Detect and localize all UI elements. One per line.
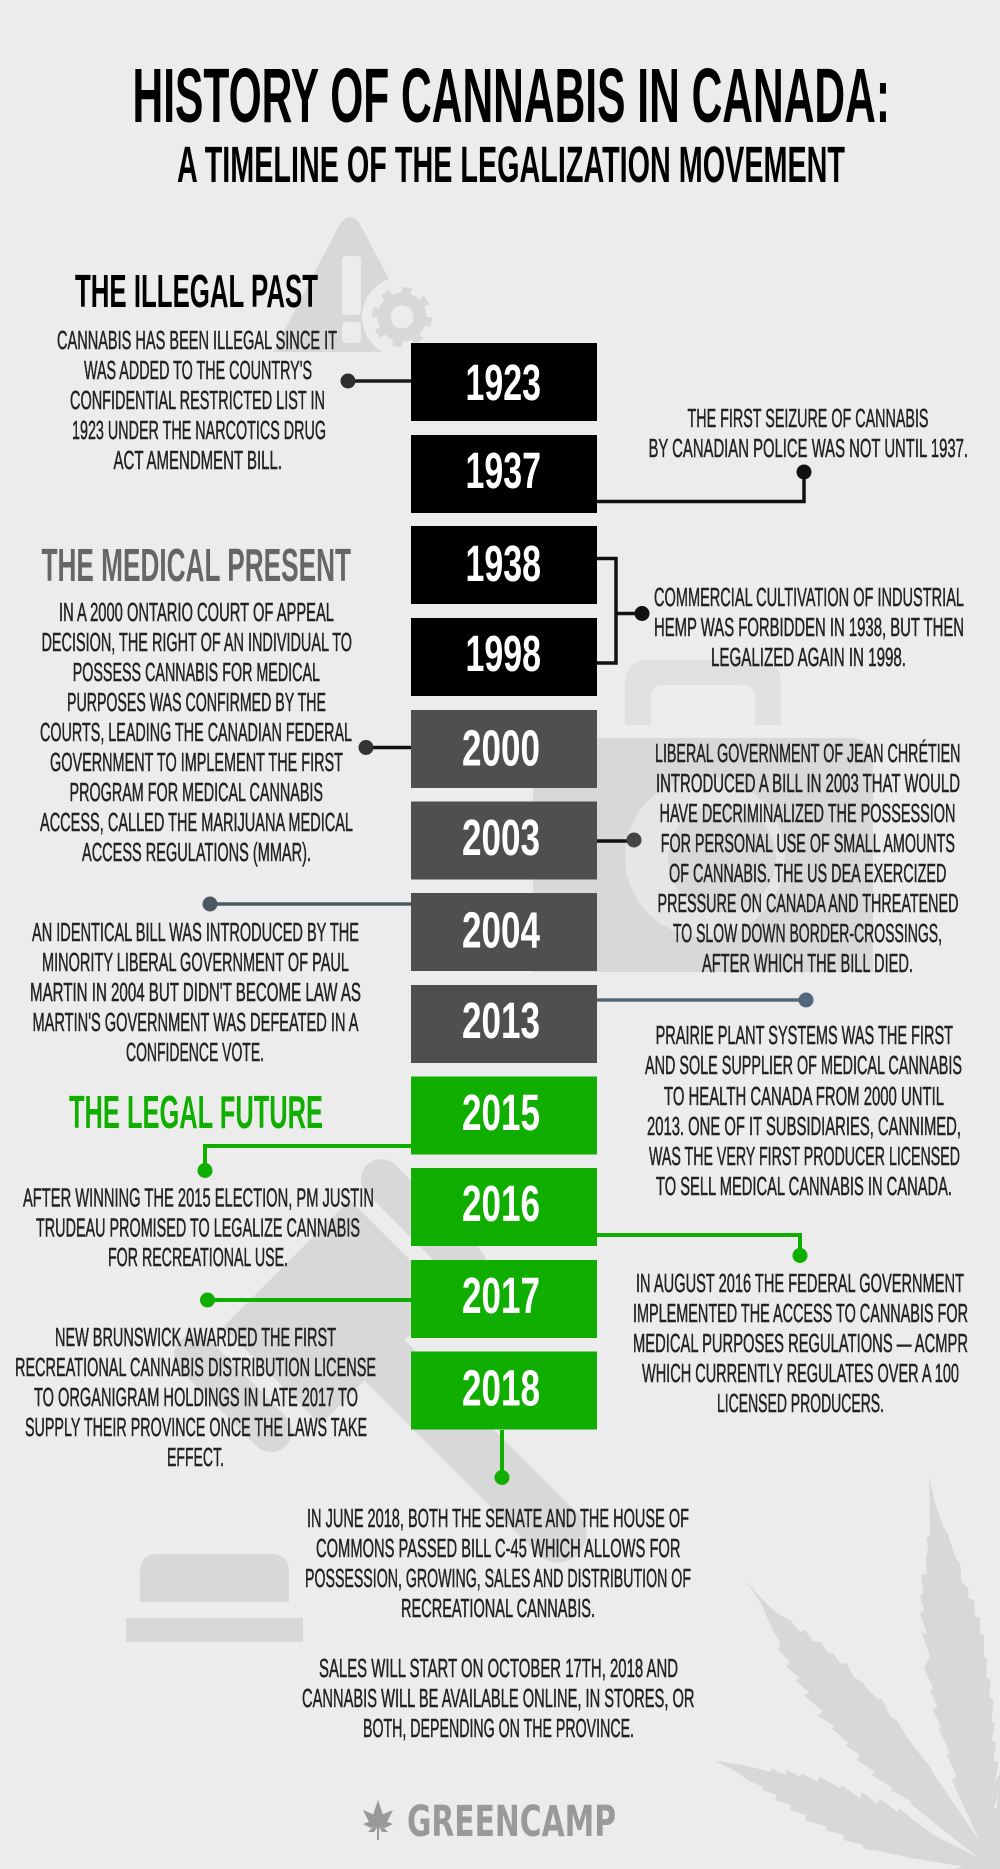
heading: the medical present: THE MEDICAL PRESENT — [42, 539, 351, 591]
icon: padlock — [533, 660, 873, 972]
year box: 1998 — [411, 618, 597, 696]
year box: 1923: 1923 — [466, 354, 541, 411]
text: 2000: DECISION, THE RIGHT OF AN INDIVIDUAL TO — [42, 629, 352, 657]
text: 1923: 1923 UNDER THE NARCOTICS DRUG — [72, 417, 326, 445]
text: 2018: POSSESSION, GROWING, SALES AND DISTRIBUTION OF — [305, 1565, 691, 1593]
text: 2000: GOVERNMENT TO IMPLEMENT THE FIRST — [50, 749, 343, 777]
year box: 2018 — [411, 1352, 597, 1430]
text: 2017: EFFECT. — [167, 1444, 224, 1472]
year box: 2003 — [411, 802, 597, 880]
text: 1938 and 1998 — [654, 584, 964, 672]
text: 2000: ACCESS REGULATIONS (MMAR). — [82, 839, 311, 867]
text: 2016 — [633, 1270, 968, 1418]
text: 2000: COURTS, LEADING THE CANADIAN FEDERAL — [40, 719, 352, 747]
text: 2000: ACCESS, CALLED THE MARIJUANA MEDICAL — [40, 809, 353, 837]
year box: 2015: 2015 — [462, 1084, 540, 1141]
text: 2018: RECREATIONAL CANNABIS. — [401, 1595, 595, 1623]
logo: greencamp — [363, 1798, 616, 1847]
connector: 2015 — [198, 1146, 411, 1178]
logo: greencamp: GREENCAMP — [407, 1798, 616, 1847]
year box: 1923 — [411, 343, 597, 421]
connector: 1937 — [597, 464, 812, 502]
year box: 2016 — [411, 1168, 597, 1246]
year box: 2013: 2013 — [462, 992, 540, 1049]
icon: cannabis leaf watermark — [714, 1477, 1000, 1869]
text: 2017 — [15, 1324, 376, 1472]
text: 2000 — [40, 599, 353, 867]
year box: 2000: 2000 — [462, 720, 540, 776]
text: 1923 — [57, 327, 337, 475]
year box: 2017 — [411, 1260, 597, 1338]
text: 2013 — [645, 1022, 962, 1201]
text: 2017: RECREATIONAL CANNABIS DISTRIBUTION LICENSE — [15, 1354, 376, 1382]
year box: 2013 — [411, 985, 597, 1063]
connector: 2016 — [597, 1235, 808, 1263]
text: 2015 — [23, 1184, 374, 1272]
year box: 2000 — [411, 710, 597, 788]
text: 2004: MARTIN'S GOVERNMENT WAS DEFEATED IN A — [32, 1009, 358, 1037]
text: 2017: NEW BRUNSWICK AWARDED THE FIRST — [55, 1324, 336, 1352]
connector: 1923 — [340, 374, 411, 388]
connector: 2003 — [597, 832, 642, 848]
connector: 2018 — [494, 1430, 510, 1485]
text: 2015: AFTER WINNING THE 2015 ELECTION, PM JUSTIN — [23, 1184, 374, 1212]
connector: 2017 — [200, 1292, 411, 1308]
text: 1923: ACT AMENDMENT BILL. — [114, 447, 282, 475]
icon: logo leaf — [363, 1800, 393, 1840]
icon: gavel — [126, 1179, 558, 1642]
text: 2015: FOR RECREATIONAL USE. — [108, 1244, 288, 1272]
year box: 1937 — [411, 435, 597, 513]
year box: 2017: 2017 — [462, 1267, 540, 1324]
text: 2004: MINORITY LIBERAL GOVERNMENT OF PAUL — [42, 949, 349, 977]
connector: 1938 and 1998 — [597, 558, 650, 663]
text: 1923: CANNABIS HAS BEEN ILLEGAL SINCE IT — [57, 327, 337, 355]
year box: 1937: 1937 — [466, 442, 541, 499]
text: 2000: PURPOSES WAS CONFIRMED BY THE — [67, 689, 326, 717]
text: 2015: TRUDEAU PROMISED TO LEGALIZE CANNABIS — [36, 1214, 360, 1242]
text: 2018: BOTH, DEPENDING ON THE PROVINCE. — [363, 1715, 634, 1743]
text: 2000: POSSESS CANNABIS FOR MEDICAL — [73, 659, 320, 687]
connector: 2013 — [597, 992, 814, 1008]
text: 2018: SALES WILL START ON OCTOBER 17TH, 2018 AND — [319, 1655, 678, 1683]
text: 1923: CONFIDENTIAL RESTRICTED LIST IN — [70, 387, 325, 415]
year box: 1938 — [411, 526, 597, 604]
connector: 2000 — [358, 740, 411, 755]
year box: 1938: 1938 — [466, 535, 541, 592]
text: 2018 — [302, 1505, 694, 1743]
text: 2018: CANNABIS WILL BE AVAILABLE ONLINE, IN STORES, OR — [302, 1685, 694, 1713]
text: 2004: AN IDENTICAL BILL WAS INTRODUCED BY THE — [32, 919, 359, 947]
text: 2017: TO ORGANIGRAM HOLDINGS IN LATE 2017 TO — [34, 1384, 358, 1412]
year box: 2003: 2003 — [462, 809, 540, 866]
icon: warning triangle with gear — [273, 217, 442, 357]
text: 2004 — [30, 919, 361, 1067]
text: 2003 — [655, 739, 960, 978]
text: 2017: SUPPLY THEIR PROVINCE ONCE THE LAWS TAKE — [25, 1414, 367, 1442]
text: 2018: IN JUNE 2018, BOTH THE SENATE AND THE HOUSE OF — [307, 1505, 689, 1533]
year box: 2004 — [411, 893, 597, 971]
heading: the illegal past: THE ILLEGAL PAST — [75, 265, 318, 317]
connector: 2004 — [202, 896, 411, 912]
text: 2004: MARTIN IN 2004 BUT DIDN'T BECOME LAW AS — [30, 979, 361, 1007]
year box: 2004: 2004 — [462, 902, 540, 958]
year box: 2016: 2016 — [462, 1175, 540, 1232]
text: 2000: PROGRAM FOR MEDICAL CANNABIS — [70, 779, 323, 807]
year box: 2015 — [411, 1076, 597, 1154]
text: 2018: COMMONS PASSED BILL C-45 WHICH ALLOWS FOR — [316, 1535, 680, 1563]
text: 2004: CONFIDENCE VOTE. — [126, 1039, 264, 1067]
text: 2000: IN A 2000 ONTARIO COURT OF APPEAL — [59, 599, 334, 627]
text: 1937 — [648, 405, 968, 463]
year box: 2018: 2018 — [462, 1360, 540, 1416]
year box: 1998: 1998 — [466, 625, 541, 682]
text: 1923: WAS ADDED TO THE COUNTRY'S — [84, 357, 312, 385]
heading: the legal future: THE LEGAL FUTURE — [69, 1086, 323, 1138]
